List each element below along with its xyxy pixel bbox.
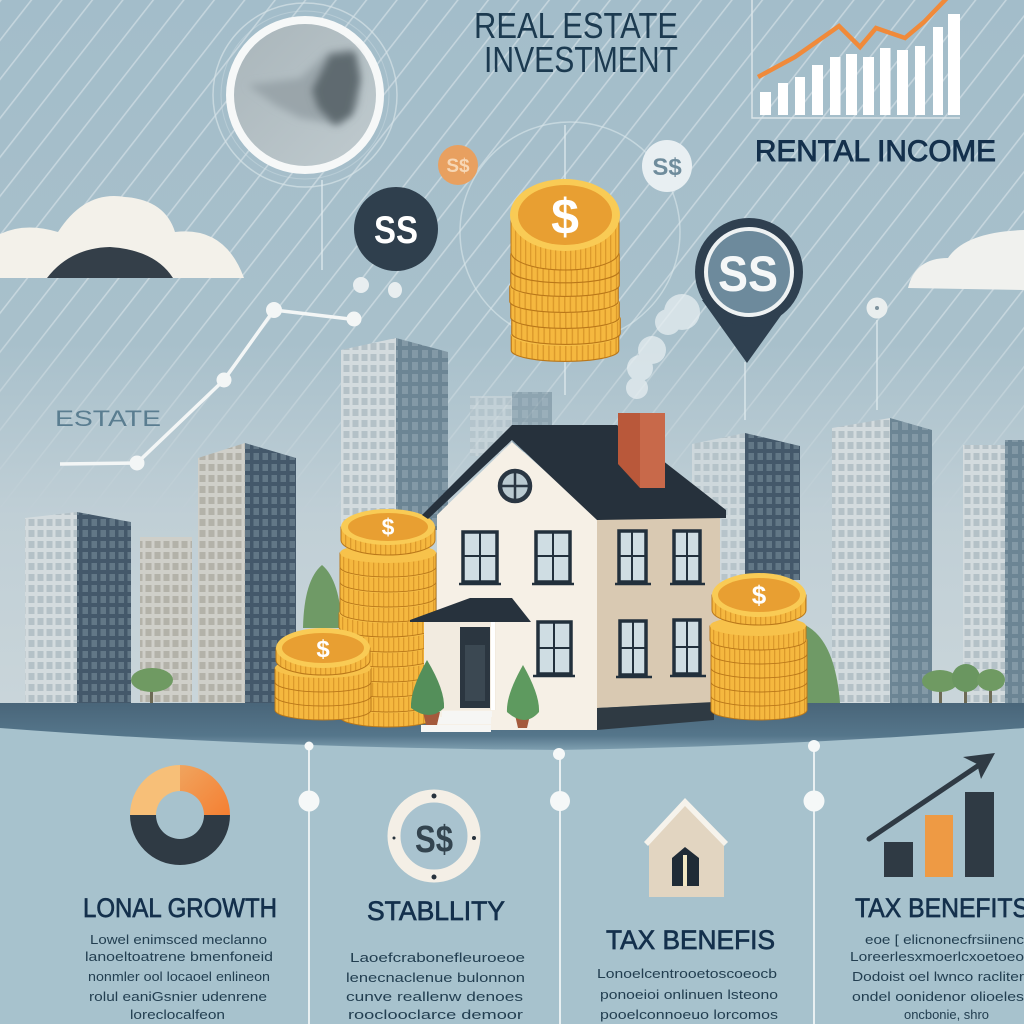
body text (597, 967, 778, 1022)
icon: location pin (695, 218, 803, 363)
body text: Lowel enimsced meclanno (90, 933, 267, 947)
body text: Lonoelcentrooetoscoeocb (597, 967, 777, 981)
title (474, 5, 678, 80)
icon: orange dollar bubble: S$ (446, 156, 470, 177)
left tall coin stack: $ (382, 514, 395, 540)
icon: white dollar bubble: S$ (652, 154, 682, 181)
window sills (459, 584, 706, 677)
windows (463, 531, 700, 675)
left tall coin stack (339, 509, 436, 727)
small trees (131, 664, 1005, 704)
building 5 (470, 392, 552, 456)
small front coin stack (275, 628, 371, 720)
lower panel (0, 720, 1024, 1024)
body text: ponoeioi onlinuen lsteono (600, 988, 778, 1002)
house (410, 413, 726, 732)
icon: location pin: SS (718, 246, 778, 302)
icon: growth bars with arrow (869, 753, 995, 877)
shrubs behind coins (303, 565, 840, 703)
cloud left (0, 196, 244, 278)
right coin stack (710, 573, 807, 720)
column: tax benefits middle (597, 798, 778, 1022)
chimney (618, 413, 665, 488)
orbit ring around coins (460, 122, 680, 342)
column: stability (346, 794, 525, 1022)
body text (346, 951, 525, 1022)
pin marker right (866, 298, 888, 318)
icon: orange dollar bubble (438, 145, 478, 185)
body text: nonmler ool locaoel enlineon (88, 970, 270, 984)
cloud right (908, 230, 1024, 290)
body text: ondel oonidenor olioeles (852, 990, 1024, 1004)
body text: Laoefcrabonefleuroeoe (350, 951, 525, 965)
body text (85, 933, 273, 1022)
icon: dark SS circle (353, 187, 438, 298)
roof (422, 425, 726, 520)
magnifier circle (213, 3, 397, 187)
title: INVESTMENT (484, 39, 678, 80)
estate label: ESTATE (55, 406, 161, 431)
side wall (597, 517, 720, 708)
foundation (597, 702, 714, 730)
icon: dollar ring: S$ (415, 819, 453, 861)
icon: dark SS circle: SS (374, 209, 418, 252)
building 3 (198, 443, 296, 703)
rental income bar chart (752, 0, 960, 118)
timeline dividers (298, 740, 824, 1024)
background sky (0, 0, 1024, 760)
icon: dollar ring (392, 794, 476, 880)
body text: oncbonie, shro (904, 1008, 989, 1022)
body text (850, 933, 1024, 1022)
body text: loreclocalfeon (130, 1008, 225, 1022)
steps (421, 711, 492, 732)
body text: cunve reallenw denoes (346, 990, 523, 1004)
smoke (626, 294, 700, 399)
body text: lanoeltoatrene bmenfoneid (85, 950, 273, 964)
round window (500, 471, 530, 501)
porch trees (411, 660, 539, 728)
heading: LONAL GROWTH (83, 893, 277, 923)
icon: white dollar bubble (642, 140, 692, 192)
building 6 (692, 433, 800, 580)
rental income label: RENTAL INCOME (755, 135, 996, 168)
front wall (437, 442, 597, 730)
column: tax benefits right (850, 753, 1024, 1022)
body text: pooelconnoeuo lorcomos (600, 1008, 778, 1022)
building 1 (25, 512, 131, 703)
central coin stack: $ (551, 189, 579, 245)
body text: eoe [ elicnonecfrsiinenc (865, 933, 1024, 947)
diagonal line pattern (0, 0, 1024, 449)
right coin stack: $ (752, 580, 767, 610)
icon: small house (644, 798, 728, 897)
window mullions (463, 531, 700, 675)
ground band (0, 703, 1024, 750)
heading: TAX BENEFIS (606, 925, 775, 955)
skyline buildings (25, 338, 1024, 703)
small front coin stack: $ (316, 636, 330, 663)
connector lines (322, 125, 877, 420)
icon: donut chart (130, 765, 230, 865)
line graph (60, 302, 362, 470)
building 7 (832, 418, 932, 703)
central coin stack (510, 179, 620, 361)
body text: lenecnaclenue bulonnon (346, 971, 525, 985)
building 8 (963, 440, 1024, 703)
building 4 (341, 338, 448, 530)
column: long growth (83, 765, 277, 1022)
body text: Dodoist oel lwnco racliter (852, 970, 1024, 984)
heading: STABLLITY (367, 896, 505, 926)
body text: rooclooclarce demoor (348, 1008, 523, 1022)
body text: Loreerlesxmoerlcxoetoeo (850, 950, 1024, 964)
body text: rolul eaniGsnier udenrene (89, 990, 267, 1004)
building 2 (140, 537, 192, 702)
porch (410, 598, 531, 710)
title: REAL ESTATE (474, 5, 678, 46)
